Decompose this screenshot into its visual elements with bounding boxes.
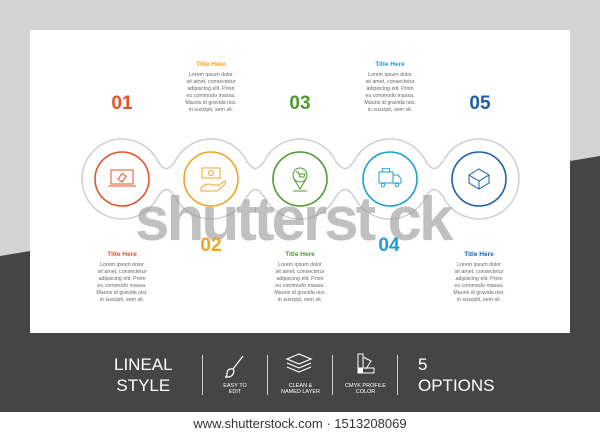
text: 04 <box>378 235 400 256</box>
text: in suscipit, sem sit. <box>100 297 144 303</box>
text: Mauris id gravida nisi. <box>364 100 416 106</box>
text: Lorem ipsum dolor <box>368 72 412 78</box>
text: adipiscing elit. Proin <box>187 86 235 92</box>
footer band: EASY TO <box>223 383 247 389</box>
icon: delivery truck <box>379 168 401 187</box>
text: Lorem ipsum dolor <box>189 72 233 78</box>
text: sit amet, consectetur <box>455 269 503 275</box>
url footer: www.shutterstock.com · 1513208069 <box>193 416 407 431</box>
text: eu commodo massa. <box>454 283 504 289</box>
text: in suscipit, sem sit. <box>368 107 412 113</box>
icon: layers <box>286 353 312 373</box>
text: eu commodo massa. <box>97 283 147 289</box>
numbers <box>111 93 491 256</box>
icon: laptop <box>108 170 136 186</box>
footer band <box>114 353 495 395</box>
text: 05 <box>469 93 491 114</box>
heading: 5 options: 5 <box>418 355 427 374</box>
text: Title Here <box>285 251 315 258</box>
text: 03 <box>289 93 311 114</box>
heading: lineal style: LINEAL <box>114 355 173 374</box>
footer band: CLEAN & <box>289 383 312 389</box>
heading: lineal style <box>114 355 173 395</box>
icon: money hand <box>201 168 226 191</box>
text: Lorem ipsum dolor <box>278 262 322 268</box>
footer band: NAMED LAYER <box>281 389 320 395</box>
footer band: CMYK PROFILE <box>345 383 386 389</box>
text: Title Here <box>464 251 494 258</box>
text: sit amet, consectetur <box>187 79 235 85</box>
text: adipiscing elit. Proin <box>98 276 146 282</box>
text: sit amet, consectetur <box>366 79 414 85</box>
text: Lorem ipsum dolor <box>457 262 501 268</box>
icon: cmyk swatch <box>358 354 374 374</box>
text: 01 <box>111 93 133 114</box>
text: eu commodo massa. <box>186 93 236 99</box>
text: Title Here <box>375 61 405 68</box>
heading: lineal style: STYLE <box>116 376 170 395</box>
panel: white card <box>30 30 570 333</box>
watermark: shutterst ck <box>135 185 450 254</box>
text: 02 <box>200 235 222 256</box>
icon: brush <box>224 356 244 378</box>
text: Title Here <box>196 61 226 68</box>
icon: location cart <box>293 168 307 191</box>
text: adipiscing elit. Proin <box>276 276 324 282</box>
text: Mauris id gravida nisi. <box>185 100 237 106</box>
heading: 5 options: OPTIONS <box>418 376 495 395</box>
text: Mauris id gravida nisi. <box>274 290 326 296</box>
icon circles <box>95 152 506 206</box>
text: Lorem ipsum dolor <box>100 262 144 268</box>
text: in suscipit, sem sit. <box>189 107 233 113</box>
text: in suscipit, sem sit. <box>457 297 501 303</box>
text: Mauris id gravida nisi. <box>453 290 505 296</box>
text: Title Here <box>107 251 137 258</box>
text: Mauris id gravida nisi. <box>96 290 148 296</box>
footer band: EDIT <box>229 389 241 395</box>
icon: box <box>469 169 489 189</box>
text: sit amet, consectetur <box>276 269 324 275</box>
text: adipiscing elit. Proin <box>366 86 414 92</box>
footer band: COLOR <box>356 389 375 395</box>
text: sit amet, consectetur <box>98 269 146 275</box>
heading: 5 options <box>418 355 495 395</box>
text: in suscipit, sem sit. <box>278 297 322 303</box>
text: eu commodo massa. <box>365 93 415 99</box>
text blocks <box>96 61 505 303</box>
text: adipiscing elit. Proin <box>455 276 503 282</box>
text: eu commodo massa. <box>275 283 325 289</box>
